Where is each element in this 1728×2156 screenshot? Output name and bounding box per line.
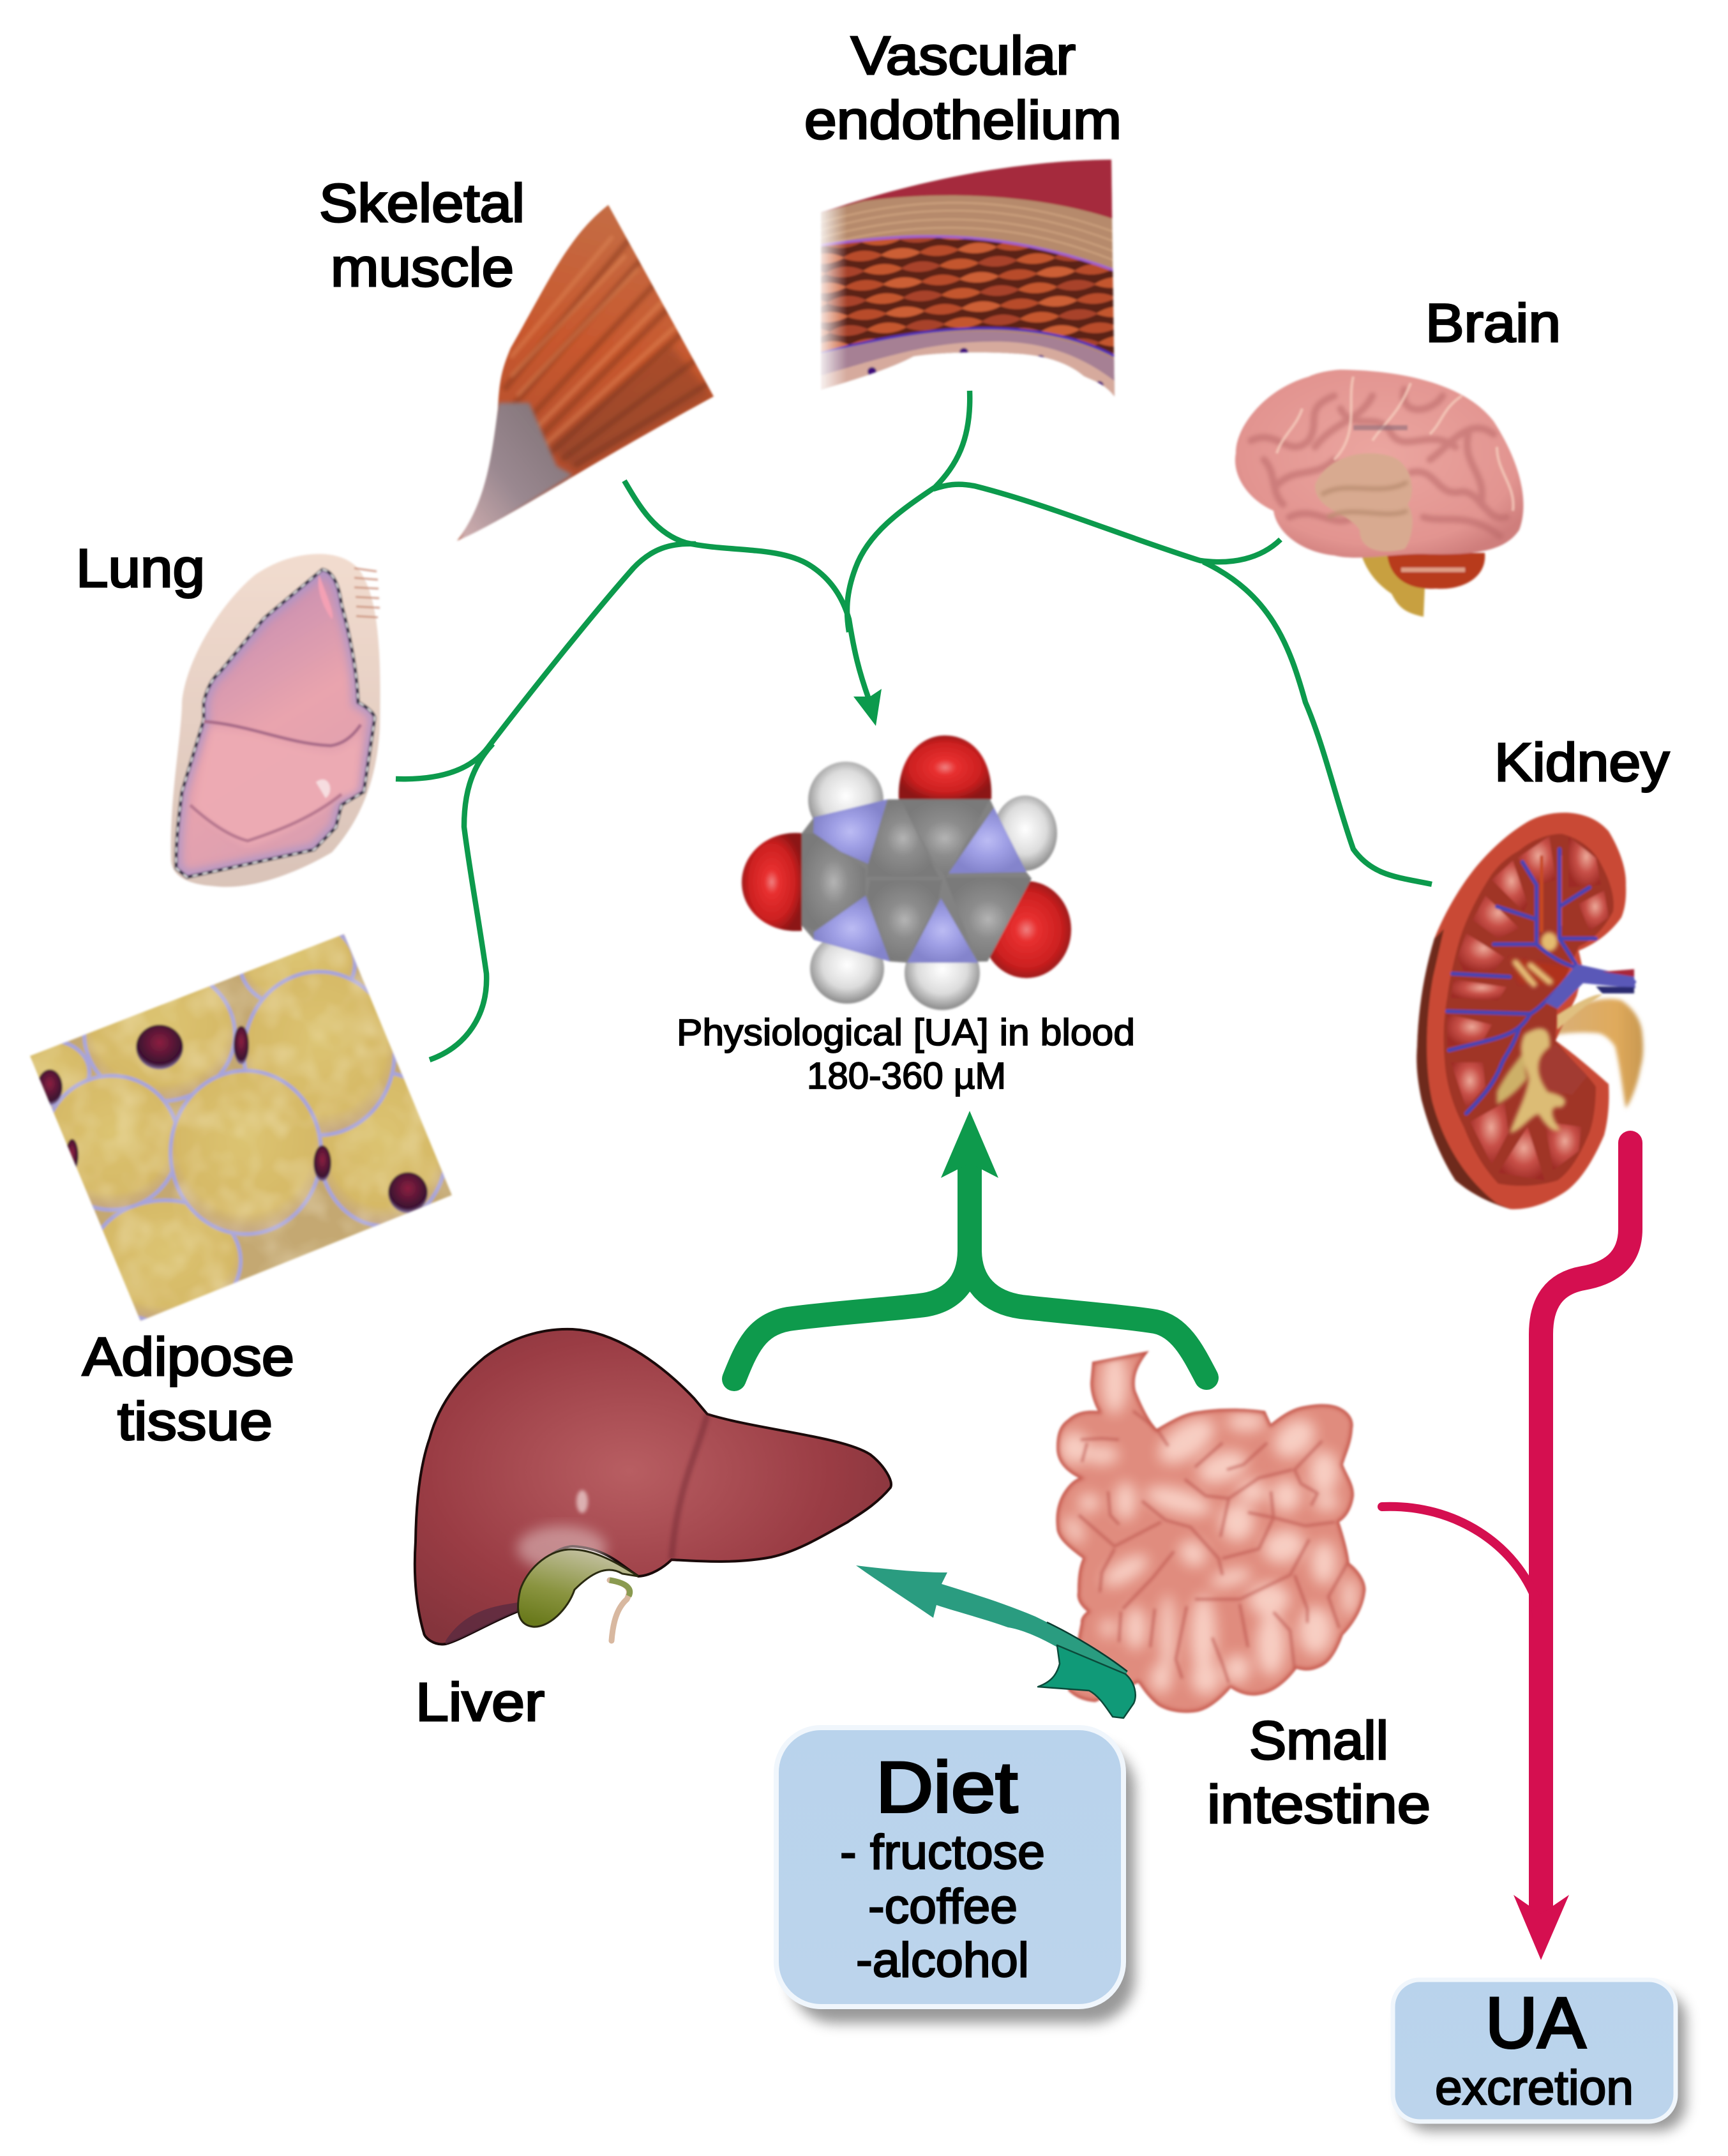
callout: Diet: -alcohol <box>856 1933 1029 1987</box>
illustration: adipose tissue <box>13 919 453 1322</box>
arrow: brain link <box>933 485 1281 562</box>
caption: physiological UA concentration: Physiological [UA] in blood <box>677 1012 1135 1053</box>
nuclei <box>136 1025 183 1069</box>
renal medulla <box>1443 833 1614 1186</box>
hydrogen atoms <box>808 762 1057 1010</box>
ring atoms <box>802 799 1032 963</box>
molecule: uric acid space-filling model <box>742 735 1071 1010</box>
arrow: kidney link <box>1203 562 1432 884</box>
oxygen atoms <box>742 735 1071 978</box>
illustration: brain <box>1235 370 1524 617</box>
gallbladder <box>518 1549 638 1627</box>
cerebrum <box>1235 370 1524 557</box>
outer shadow edge of kidney <box>1416 929 1511 1209</box>
label: Small intestine <box>1207 1710 1431 1834</box>
label: Adipose tissue <box>82 1327 294 1451</box>
callout: UA excretion: excretion <box>1435 2061 1634 2115</box>
fat cells <box>13 919 447 1322</box>
illustration: lung <box>171 554 380 887</box>
temporal lobe <box>1315 453 1413 552</box>
label: Skeletal muscle: Skeletal <box>319 173 525 233</box>
label: Adipose tissue: Adipose <box>82 1327 294 1387</box>
callout: UA excretion: UA <box>1485 1983 1586 2063</box>
callout: Diet: -coffee <box>868 1880 1018 1934</box>
callout: Diet: Diet <box>876 1747 1018 1827</box>
bile duct <box>610 1580 629 1641</box>
label: Adipose tissue: tissue <box>117 1391 273 1451</box>
label: Small intestine: Small <box>1249 1710 1388 1770</box>
label: Kidney: Kidney <box>1494 732 1669 792</box>
label: Vascular endothelium <box>804 26 1122 150</box>
arrow: intestine to excretion <box>1382 1507 1537 1602</box>
arrowhead: into uric acid molecule <box>853 689 882 726</box>
ureter <box>1553 999 1643 1108</box>
label: Vascular endothelium: endothelium <box>804 90 1122 150</box>
crease lines <box>1079 1411 1348 1683</box>
blood vessels <box>1447 849 1634 1113</box>
label: Skeletal muscle: muscle <box>331 237 514 298</box>
caption: physiological UA concentration <box>677 1012 1135 1097</box>
brain stem <box>1360 549 1425 617</box>
illustration: liver <box>415 1329 891 1644</box>
illustration: small intestine <box>1047 1347 1379 1724</box>
illustration: vascular endothelium cross-section <box>817 153 1117 402</box>
mottled fat texture <box>26 932 453 1322</box>
callout: Diet: - fructose <box>840 1825 1045 1880</box>
outer rim shading <box>1056 1351 1365 1713</box>
arrow: kidney to UA excretion <box>1382 1143 1630 1960</box>
arrow: lung link <box>396 544 696 779</box>
small brain labels <box>1353 425 1408 430</box>
label: Vascular endothelium: Vascular <box>851 26 1076 86</box>
arrow: muscle to blood <box>624 481 869 699</box>
label: Brain: Brain <box>1425 293 1561 353</box>
label: Small intestine: intestine <box>1207 1774 1431 1834</box>
label: Skeletal muscle <box>319 173 525 298</box>
caption: physiological UA concentration: 180-360 µM <box>807 1055 1006 1097</box>
callout: Diet <box>776 1728 1135 2023</box>
illustration: kidney <box>1416 813 1643 1209</box>
illustration: skeletal muscle <box>456 204 715 541</box>
bowel loop highlights <box>1060 1352 1357 1695</box>
arrow: vascular endothelium and others to blood <box>847 391 970 632</box>
label: Lung: Lung <box>76 538 205 598</box>
arrow: adipose link <box>430 744 493 1060</box>
callout: UA excretion <box>1393 1980 1686 2131</box>
renal sinus <box>1497 932 1570 1133</box>
cerebellum <box>1387 553 1485 589</box>
label: Liver: Liver <box>416 1672 545 1732</box>
arrow: liver and intestine into blood <box>734 1111 1206 1379</box>
arrow: diet to liver <box>856 1565 1136 1718</box>
kidney body <box>1416 813 1626 1209</box>
